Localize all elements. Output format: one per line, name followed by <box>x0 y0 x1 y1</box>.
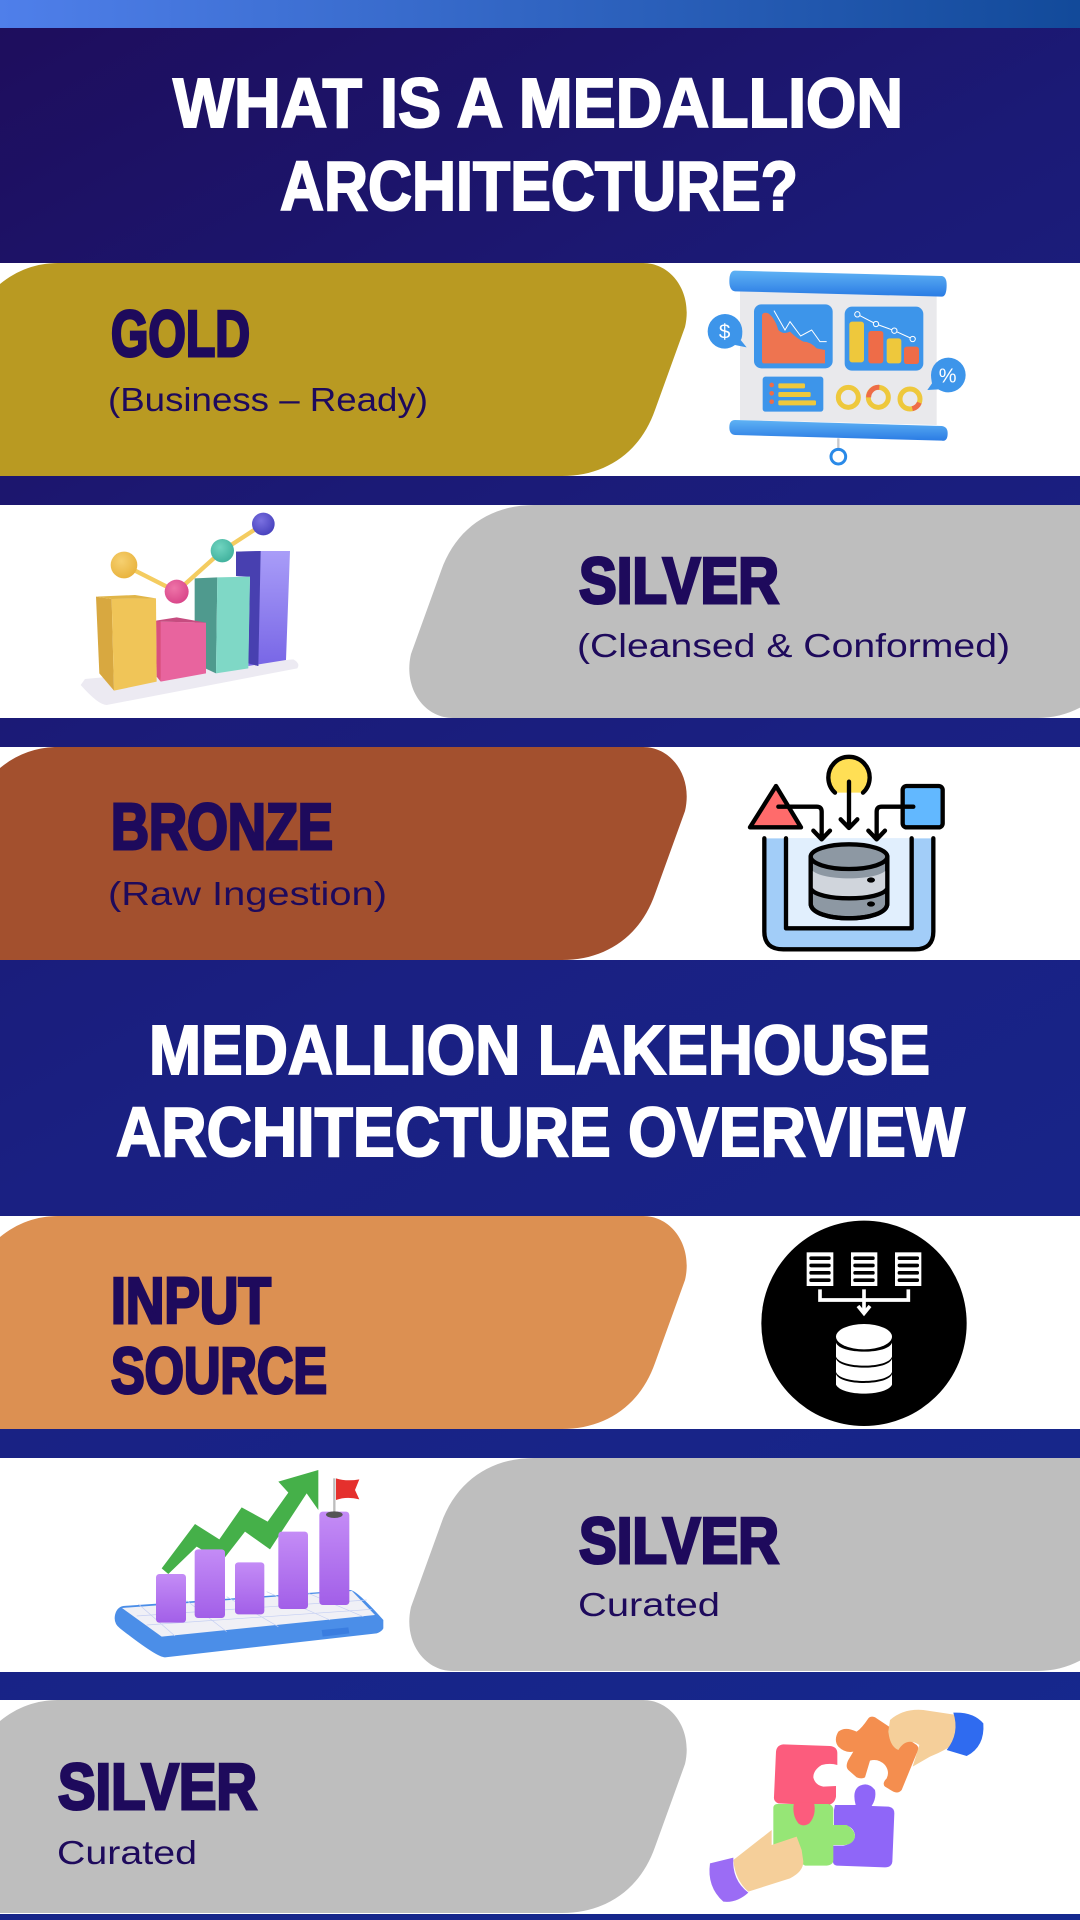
icon: sources flowing into database <box>761 1221 967 1426</box>
panel: silver curated right: SILVER <box>579 1504 779 1577</box>
title: medallion lakehouse architecture overview: MEDALLION LAKEHOUSE <box>149 1011 930 1089</box>
panel: gold: (Business – Ready) <box>108 381 428 418</box>
icon: data ingestion into database <box>750 757 943 949</box>
icon: presentation board: $ <box>719 321 731 344</box>
panel: bronze <box>0 747 1080 960</box>
panel: silver curated left <box>0 1700 1080 1914</box>
panel: gold: GOLD <box>111 297 250 370</box>
panel: silver curated right <box>0 1458 1080 1672</box>
icon: presentation board <box>708 271 966 464</box>
title: what is a medallion architecture <box>173 64 903 225</box>
title: what is a medallion architecture: WHAT IS A MEDALLION <box>173 64 903 142</box>
panel: gold <box>0 263 1080 476</box>
icon: presentation board: % <box>939 366 957 388</box>
panel: silver curated right: Curated <box>578 1586 720 1623</box>
panel: bronze: BRONZE <box>111 790 333 863</box>
panel: input source <box>0 1216 1080 1429</box>
panel: silver cleansed: (Cleansed & Conformed) <box>577 627 1010 664</box>
panel: silver curated left: Curated <box>57 1834 197 1871</box>
title: medallion lakehouse architecture overview: ARCHITECTURE OVERVIEW <box>116 1093 965 1171</box>
panel: input source: INPUT <box>111 1264 271 1337</box>
icon: hands joining puzzle pieces <box>709 1710 983 1902</box>
panel: bronze: (Raw Ingestion) <box>108 875 387 912</box>
title: medallion lakehouse architecture overview <box>116 1011 965 1171</box>
panel: silver cleansed <box>0 505 1080 718</box>
panel: input source: SOURCE <box>111 1334 327 1407</box>
icon: growth chart on phone <box>115 1470 383 1657</box>
icon: 3d bar chart <box>81 513 298 705</box>
panel: silver curated left: SILVER <box>58 1750 257 1823</box>
panel: silver cleansed: SILVER <box>579 544 779 617</box>
top gradient bar <box>0 0 1080 28</box>
title: what is a medallion architecture: ARCHITECTURE? <box>280 147 798 225</box>
